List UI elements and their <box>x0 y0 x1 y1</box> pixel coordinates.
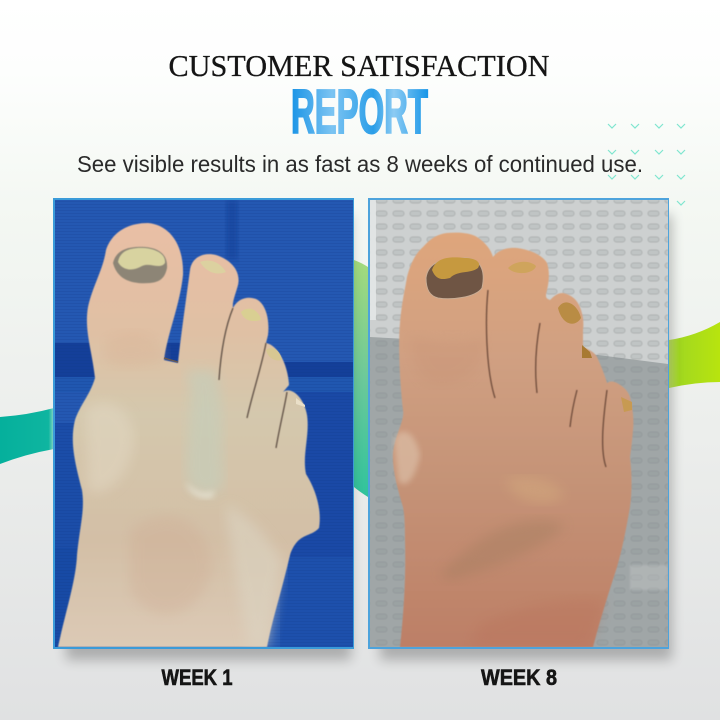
icon: chevron pattern <box>608 124 685 205</box>
decorative wave: green centre <box>354 260 368 497</box>
gap between toes <box>482 340 492 380</box>
title: CUSTOMER SATISFACTION <box>168 48 550 83</box>
caption: week 8: WEEK 8 <box>481 665 557 690</box>
panel: week 8 photo <box>368 198 672 660</box>
cloth background <box>55 200 353 647</box>
subtitle: See visible results in as fast as 8 weeks of continued use. <box>77 151 643 177</box>
toenails <box>113 247 167 283</box>
towel background <box>370 200 668 647</box>
foot silhouette <box>58 223 320 647</box>
heading: report: REPORT <box>291 78 428 147</box>
decorative wave: teal <box>0 408 54 464</box>
caption: week 1: WEEK 1 <box>162 665 232 690</box>
pale vein patch <box>190 371 220 488</box>
panel: week 1 photo <box>53 198 354 660</box>
lower foot highlights <box>225 505 282 647</box>
foot silhouette <box>393 233 633 647</box>
toenails <box>426 258 483 299</box>
decorative wave: lime <box>669 322 720 388</box>
toe creases <box>486 290 607 467</box>
toe creases <box>164 358 178 362</box>
